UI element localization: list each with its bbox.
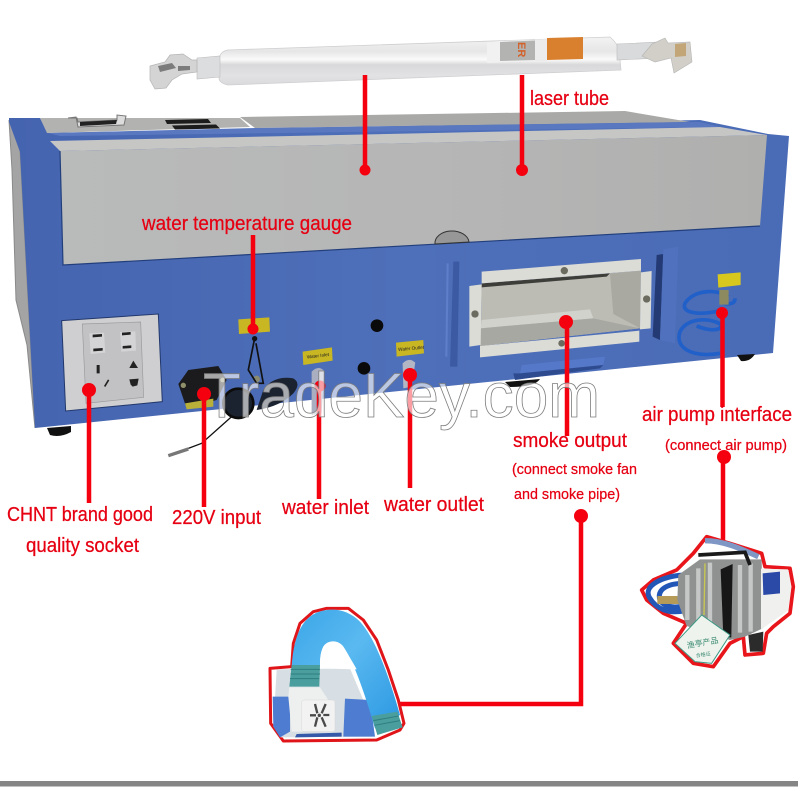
window shadow: [482, 273, 610, 287]
pump strap: [721, 564, 733, 637]
socket panel: [62, 314, 162, 411]
air pump photo: [642, 537, 793, 667]
bottom gray bar: [0, 781, 798, 786]
left tube head: [150, 54, 197, 89]
air hose coil: [679, 292, 728, 354]
connector: [257, 378, 297, 410]
pump foot: [748, 632, 763, 652]
smoke pipe pointer: [400, 516, 581, 704]
left rail: [450, 262, 459, 367]
top handle: [68, 115, 126, 127]
label: smoke output: smoke output: [513, 430, 627, 452]
left tube neck: [197, 56, 220, 79]
label: socket: [7, 504, 153, 557]
window bottom tab: [520, 357, 605, 373]
labels: [7, 88, 792, 557]
fan plate: [302, 700, 335, 732]
pump handle: [698, 552, 750, 565]
label: smoke output: and smoke pipe): [514, 486, 620, 503]
gauge wire: [248, 338, 263, 383]
water inlet label: Water Inlet: [306, 352, 330, 360]
label: 220V input: 220V input: [172, 507, 261, 529]
window ledge: [481, 309, 593, 328]
panel notch: [435, 231, 469, 244]
fan outline: [270, 608, 404, 741]
socket holes: [93, 332, 131, 387]
lid bevel: [50, 127, 767, 151]
air label: [718, 272, 741, 288]
smoke output window and air interface: [445, 247, 741, 380]
label: socket: quality socket: [26, 535, 139, 557]
pump hoses: [648, 575, 685, 612]
laser tube pointers: [365, 75, 522, 170]
right tube head: [642, 38, 692, 73]
feet: [47, 354, 755, 436]
air fitting: [719, 290, 729, 305]
water outlet nozzle: [403, 360, 415, 388]
right rail: [653, 254, 663, 340]
watermark: TradeKey.com: [203, 361, 600, 431]
gauge label: [238, 317, 270, 334]
label: smoke output: (connect smoke fan: [512, 461, 637, 478]
machine blue body: [9, 118, 789, 428]
laser tube photo: [150, 37, 692, 89]
machine side strip: [9, 120, 35, 428]
water outlet pointer: [408, 375, 412, 488]
gray front panel: [60, 135, 767, 265]
label: air pump interface: (connect air pump): [665, 437, 787, 454]
label: water inlet: water inlet: [281, 497, 369, 519]
label: water temperature gauge: water temperature gauge: [141, 213, 352, 235]
socket pointer: [87, 390, 91, 503]
pump motor: [761, 569, 791, 629]
smoke output pointer: [565, 322, 569, 436]
pump tag: [675, 615, 730, 663]
smoke pipe: [292, 610, 400, 728]
motor label: [763, 572, 780, 595]
tube glass body: [219, 37, 621, 85]
power cable coil: [223, 389, 253, 418]
power pointer: [202, 394, 206, 507]
label: water outlet: water outlet: [383, 494, 484, 516]
water inlet label: [303, 347, 333, 365]
blue strip under lid: [48, 122, 720, 136]
top slots: [165, 119, 220, 130]
pump outline: [642, 537, 793, 667]
pump gray body: [677, 559, 763, 640]
window flanges: [482, 259, 641, 283]
temperature probe cable: [188, 417, 232, 448]
pump tag: 渔亭产品: [686, 635, 719, 650]
temperature probe tip: [168, 449, 188, 456]
pump fins: [687, 563, 751, 633]
pump tag: 合格证: [695, 650, 711, 659]
water outlet label: Water Outlet: [398, 345, 425, 352]
fan backdrop: [273, 668, 373, 737]
power inlet and cables: [168, 317, 425, 456]
white sticker: [535, 39, 547, 61]
label: laser tube: laser tube: [530, 88, 609, 110]
label: smoke output: [512, 430, 637, 503]
air interface pointer: [720, 313, 725, 407]
fan housing: [288, 687, 328, 732]
orange sticker: [547, 37, 583, 60]
pointer lines and dots: [82, 75, 731, 704]
gauge pointer: [251, 235, 255, 329]
fan base dark edge: [295, 733, 342, 737]
machine blue part: [273, 697, 375, 737]
right tube neck: [617, 42, 660, 60]
brand letters on tube: ER: [515, 42, 527, 57]
window screws: [561, 267, 568, 274]
chassis holes: [371, 319, 383, 332]
right top lid: [240, 111, 690, 128]
window back wall: [481, 271, 641, 346]
arch opening: [320, 641, 357, 669]
smoke fan and pipe photo: [270, 608, 404, 741]
pump nozzle: [657, 596, 679, 604]
label: air pump interface: air pump interface: [642, 404, 792, 426]
label: air pump interface: [642, 404, 792, 454]
label: socket: CHNT brand good: [7, 504, 153, 526]
laser machine rear view: [9, 111, 789, 456]
left top lid: [40, 115, 250, 133]
pipe collars: [289, 665, 320, 687]
gray sticker: [487, 40, 535, 63]
air pump pointer: [721, 457, 725, 542]
window floor: [480, 318, 640, 346]
water inlet pointer: [317, 386, 321, 499]
water inlet nozzle: [312, 368, 324, 415]
window right wall: [610, 271, 641, 328]
tag string: [702, 563, 707, 615]
water outlet label: [396, 340, 425, 357]
